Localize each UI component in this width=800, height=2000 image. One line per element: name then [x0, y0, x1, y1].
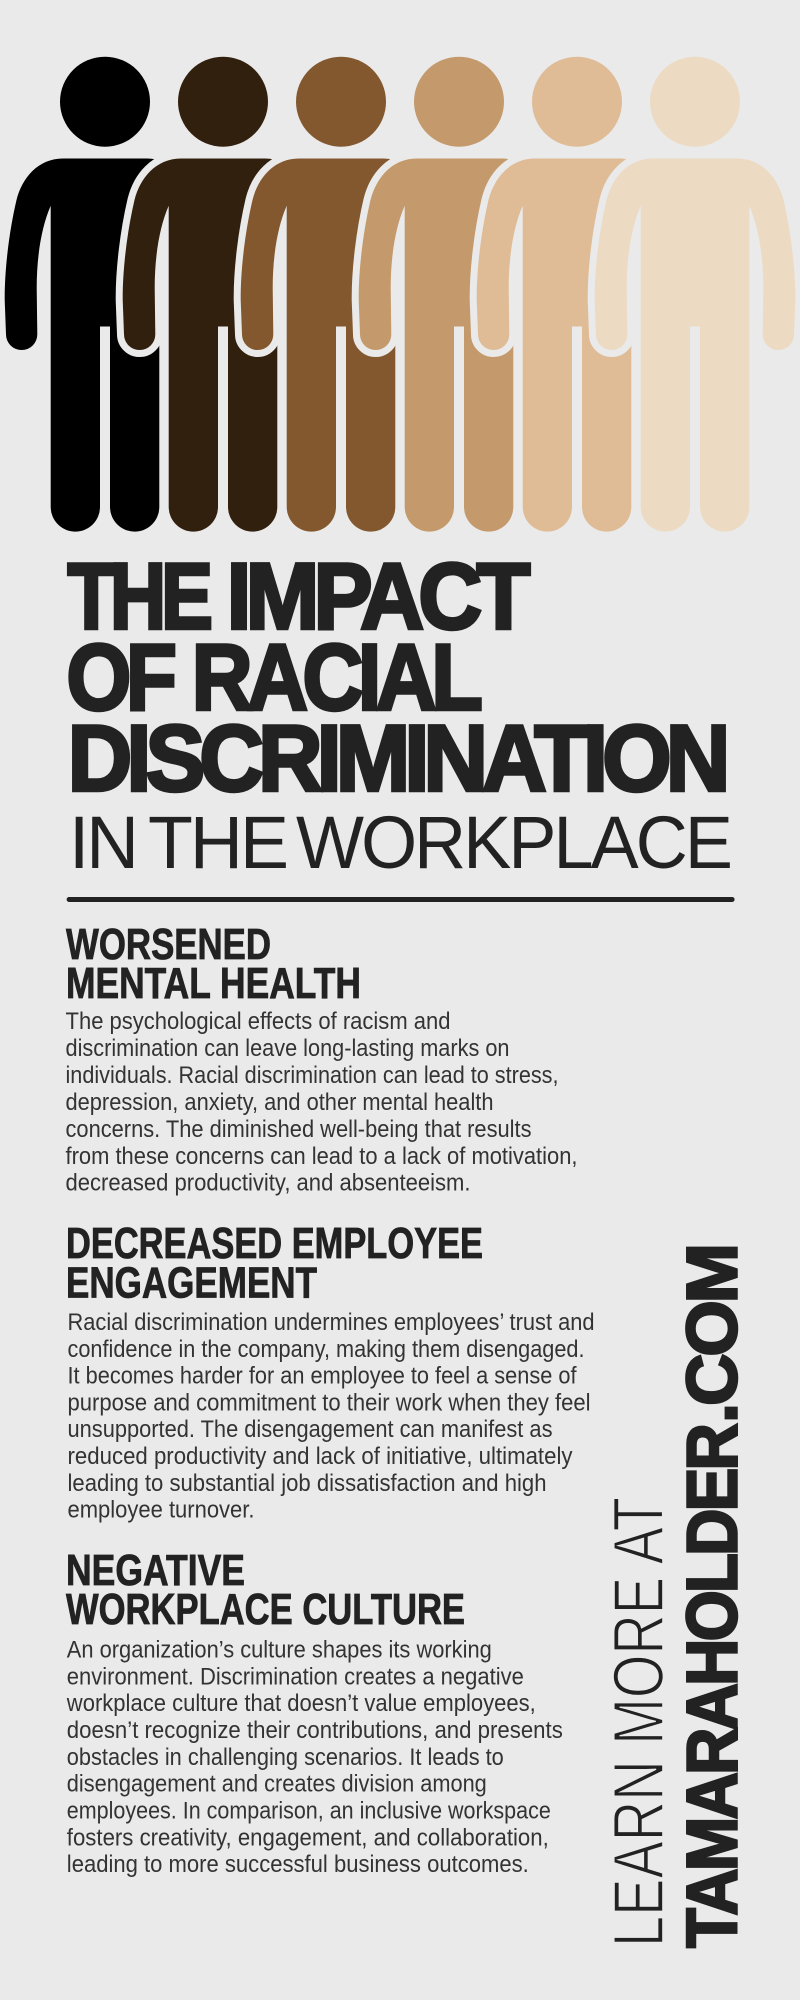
body text [66, 1636, 563, 1878]
body text: leading to substantial job dissatisfaction and high [68, 1470, 546, 1497]
body text: purpose and commitment to their work when they feel [68, 1390, 590, 1416]
heading: NEGATIVE [66, 1546, 245, 1595]
section: worsened mental health [66, 920, 578, 1196]
body text: fosters creativity, engagement, and collaboration, [67, 1824, 549, 1852]
body text: workplace culture that doesn’t value employees, [66, 1690, 536, 1717]
vertical call to action: TAMARAHOLDER [674, 1424, 752, 1948]
body text: confidence in the company, making them disengaged. [68, 1336, 584, 1363]
body text: obstacles in challenging scenarios. It leads to [67, 1744, 504, 1771]
vertical call to action: .COM [674, 1246, 752, 1423]
heading: ENGAGEMENT [66, 1258, 317, 1308]
icon: person light tan [477, 57, 677, 532]
heading: WORKPLACE CULTURE [66, 1585, 465, 1634]
vertical call to action: LEARN MORE AT [600, 1497, 679, 1947]
body text: reduced productivity and lack of initiative, ultimately [68, 1443, 573, 1470]
body text: doesn’t recognize their contributions, and presents [67, 1717, 563, 1744]
body text: Racial discrimination undermines employees’ trust and [68, 1309, 594, 1336]
title: DISCRIMINATION [68, 706, 725, 810]
body text: An organization’s culture shapes its working [67, 1636, 492, 1664]
icon: person pale beige [595, 57, 795, 532]
body text: individuals. Racial discrimination can lead to stress, [66, 1062, 558, 1089]
icon: person dark brown [123, 57, 323, 532]
body text: It becomes harder for an employee to feel a sense of [68, 1362, 577, 1390]
divider rule [67, 897, 735, 902]
body text: leading to more successful business outcomes. [67, 1851, 529, 1878]
vertical call to action [600, 1246, 752, 1948]
icon: person black [5, 57, 205, 532]
body text: discrimination can leave long-lasting marks on [66, 1035, 510, 1062]
body text: concerns. The diminished well-being that results [66, 1116, 532, 1143]
section: negative workplace culture [66, 1546, 563, 1878]
title: RACIAL [192, 624, 481, 730]
body text [68, 1309, 594, 1524]
heading: WORSENED [66, 920, 271, 969]
heading [66, 920, 361, 1008]
title: WORKPLACE [296, 801, 731, 884]
heading: DECREASED EMPLOYEE [66, 1219, 483, 1268]
section: decreased employee engagement [66, 1219, 594, 1524]
title [66, 544, 731, 884]
body text: from these concerns can lead to a lack of motivation, [66, 1143, 578, 1170]
title: THE [68, 544, 211, 648]
title: OF [66, 624, 174, 730]
icon: person medium brown [241, 57, 441, 532]
body text: The psychological effects of racism and [66, 1008, 450, 1035]
body text: environment. Discrimination creates a negative [67, 1664, 524, 1690]
body text: depression, anxiety, and other mental health [66, 1089, 494, 1116]
body text: decreased productivity, and absenteeism. [66, 1170, 470, 1196]
body text: unsupported. The disengagement can manifest as [68, 1416, 552, 1443]
heading [66, 1546, 465, 1634]
icon: row of six people in graded skin tones [5, 57, 795, 532]
body text: disengagement and creates division among [67, 1770, 487, 1798]
body text: employee turnover. [68, 1496, 254, 1524]
icon: person tan [359, 57, 559, 532]
body text [66, 1008, 578, 1196]
body text: employees. In comparison, an inclusive workspace [67, 1798, 551, 1824]
title: THE [148, 801, 287, 884]
heading: MENTAL HEALTH [66, 959, 361, 1008]
heading [66, 1219, 483, 1308]
title: IMPACT [227, 544, 530, 648]
title: IN [69, 801, 136, 884]
